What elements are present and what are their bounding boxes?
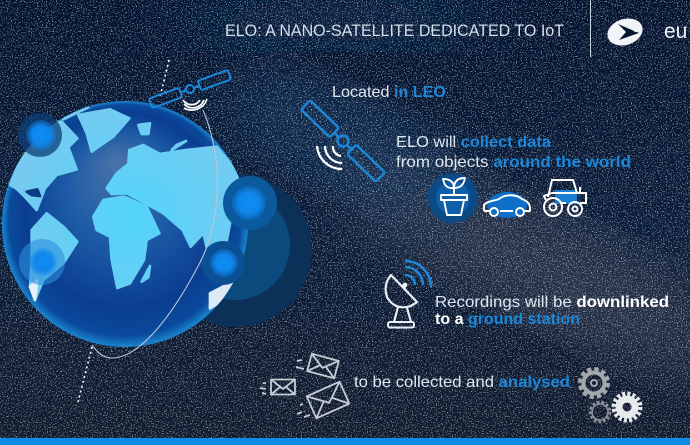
hotspot: south east asia bbox=[201, 241, 245, 285]
gear: outline bbox=[590, 402, 610, 422]
globe bbox=[2, 101, 248, 347]
icon: small satellite bbox=[149, 70, 231, 110]
hotspots on globe bbox=[18, 113, 277, 285]
heading: ELO: A NANO-SATELLITE DEDICATED TO IoT bbox=[225, 21, 564, 40]
icon: envelopes bbox=[260, 354, 349, 418]
icon: plant bbox=[428, 173, 478, 223]
text: downlink: to a ground station bbox=[435, 311, 580, 328]
divider bbox=[590, 0, 591, 57]
text: collect data bbox=[396, 134, 631, 171]
logo: eu bbox=[664, 20, 687, 43]
text: downlink: Recordings will be downlinked bbox=[435, 294, 669, 311]
hotspot: east asia bbox=[223, 176, 277, 230]
text: located in LEO: Located in LEO bbox=[332, 84, 446, 101]
gear: white bbox=[614, 394, 640, 420]
gear: top bbox=[581, 370, 607, 396]
icon: esa mark bbox=[604, 14, 646, 50]
icon: car bbox=[484, 192, 530, 218]
bottom bar bbox=[0, 438, 690, 445]
envelope: large bbox=[307, 382, 349, 418]
logo bbox=[604, 14, 687, 50]
rotation axis bbox=[78, 60, 169, 402]
icon: gears bbox=[581, 370, 640, 422]
envelope: left bbox=[271, 380, 295, 394]
continents bbox=[10, 107, 245, 308]
hotspot: north america bbox=[18, 113, 62, 157]
icon: large satellite bbox=[301, 100, 385, 182]
icon: tractor bbox=[544, 180, 586, 216]
text: collect data: ELO will collect data bbox=[396, 134, 551, 151]
envelope: top bbox=[307, 354, 339, 378]
text: downlink bbox=[435, 294, 669, 328]
signal halos behind globe bbox=[158, 173, 312, 327]
orbit path bbox=[92, 110, 217, 358]
text: collect data: from objects around the world bbox=[396, 154, 631, 171]
hotspot: south america bbox=[19, 239, 65, 285]
icon: satellite dish bbox=[386, 261, 431, 328]
text: analysed: to be collected and analysed bbox=[354, 374, 570, 391]
